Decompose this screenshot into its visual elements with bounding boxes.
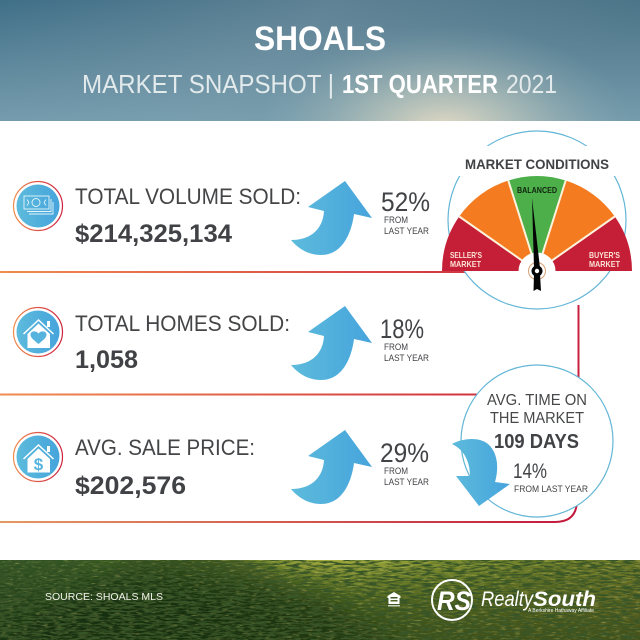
logo: Realty <box>481 588 534 611</box>
change: FROM LAST YEAR <box>514 484 588 494</box>
icon: house dollar: $ <box>34 455 44 474</box>
arrow up <box>291 430 372 504</box>
icon: equal housing <box>388 592 400 606</box>
subtitle: 2021 <box>506 69 557 99</box>
panel: average time on market <box>452 365 613 517</box>
subtitle: MARKET SNAPSHOT | <box>82 69 334 99</box>
value: $214,325,134 <box>75 220 232 248</box>
change: 29% <box>380 438 429 468</box>
segment label: buyer's market: MARKET <box>589 259 621 269</box>
header sky banner <box>0 0 640 121</box>
row 1: total volume <box>14 181 430 255</box>
segment label: balanced: BALANCED <box>517 186 557 195</box>
row 2: total homes <box>14 306 429 380</box>
change: FROM <box>384 215 408 226</box>
segment label: buyer's market: BUYER'S <box>589 250 620 260</box>
icon: money <box>14 182 62 230</box>
row 3: average sale price <box>14 430 429 504</box>
icon: house dollar <box>14 432 62 482</box>
change: LAST YEAR <box>384 353 429 364</box>
change <box>381 187 430 237</box>
heading: THE MARKET <box>490 410 584 427</box>
heading: AVG. TIME ON <box>487 392 587 409</box>
label: AVG. SALE PRICE: <box>75 435 255 460</box>
needle <box>528 198 546 291</box>
change <box>513 460 588 494</box>
change <box>380 438 429 488</box>
subtitle: 1ST QUARTER <box>342 69 498 99</box>
label: TOTAL HOMES SOLD: <box>75 311 290 336</box>
title: SHOALS <box>254 20 386 58</box>
icon: house heart <box>14 308 62 356</box>
heading <box>487 392 587 427</box>
arrow up <box>291 306 372 380</box>
logo: South <box>533 588 596 611</box>
gauge segments <box>442 176 632 290</box>
change: 18% <box>380 314 424 344</box>
heading: MARKET CONDITIONS <box>465 156 609 172</box>
change: LAST YEAR <box>384 477 429 488</box>
change: FROM <box>384 342 408 353</box>
segment label: seller's market <box>450 250 482 269</box>
logo: A Berkshire Hathaway Affiliate <box>528 608 594 614</box>
arrow up <box>291 181 372 255</box>
logo: RS <box>437 586 471 616</box>
segment label: buyer's market <box>589 250 621 269</box>
logo <box>432 580 596 620</box>
footer grass banner <box>0 560 640 640</box>
segment label: seller's market: MARKET <box>450 259 482 269</box>
change: 14% <box>513 460 547 483</box>
subtitle <box>82 69 557 99</box>
value: 109 DAYS <box>494 431 579 453</box>
change: 52% <box>381 187 430 217</box>
divider lines and connector <box>0 271 578 522</box>
arrow down <box>452 439 510 506</box>
value: $202,576 <box>75 472 186 500</box>
change: FROM <box>384 466 408 477</box>
change: LAST YEAR <box>384 226 429 237</box>
source: SOURCE: SHOALS MLS <box>45 591 163 603</box>
value: 1,058 <box>75 346 138 374</box>
segment label: seller's market: SELLER'S <box>450 250 482 260</box>
change <box>380 314 429 364</box>
label: TOTAL VOLUME SOLD: <box>75 184 301 209</box>
panel: market conditions gauge <box>442 131 632 309</box>
